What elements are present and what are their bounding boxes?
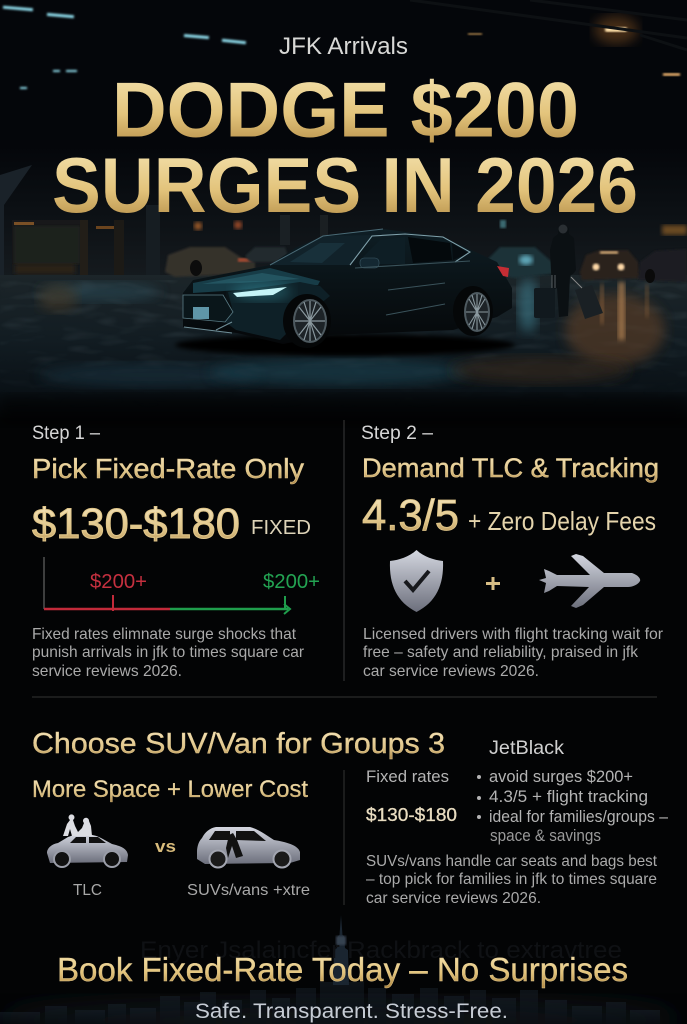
icon: sedan with two passengers: [47, 814, 128, 867]
tagline: Safe. Transparent. Stress-Free.: [195, 999, 508, 1023]
terminal structure: [0, 145, 687, 277]
step 2 heading: Demand TLC & Tracking: [362, 453, 659, 483]
icon: plus: [486, 577, 500, 590]
black sedan: [183, 229, 512, 348]
ground reflections: [38, 277, 665, 387]
price range small: $130-$180: [366, 804, 457, 825]
benefits list: space & savings: [490, 826, 601, 845]
step 3 description: [366, 853, 658, 907]
step 2 label: Step 2 –: [361, 423, 433, 444]
benefits list: 4.3/5 + flight tracking: [489, 787, 648, 806]
brand: JetBlack: JetBlack: [489, 737, 564, 759]
car shadow: [175, 334, 515, 356]
background cars: [165, 247, 687, 283]
call to action: Book Fixed-Rate Today – No Surprises: [57, 952, 628, 989]
step 1 heading: Pick Fixed-Rate Only: [32, 453, 304, 484]
fixed tag: FIXED: [251, 517, 311, 539]
step 1 description: [32, 626, 305, 680]
zero delay fees: + Zero Delay Fees: [468, 506, 656, 536]
fade to black below the photo: [0, 395, 687, 425]
label: TLC: TLC: [73, 882, 102, 899]
chart: surge versus fixed price line: $200+: [90, 571, 147, 593]
traveller with luggage: [534, 224, 603, 319]
benefits list: avoid surges $200+: [489, 767, 633, 786]
vs label: vs: [155, 837, 176, 856]
ground texture: [6, 280, 686, 360]
main title: SURGES IN 2026: [52, 141, 638, 229]
hero photo: night airport scene with black sedan: [0, 0, 687, 425]
ceiling lights: [3, 0, 687, 89]
panel: step 3, SUV or van for groups: [32, 728, 668, 907]
panel: step 1: [32, 423, 320, 680]
step 2 description: [363, 626, 664, 680]
front wheel: [283, 294, 331, 348]
footer skyline: [0, 915, 680, 1024]
rear wheel: [453, 286, 493, 336]
icon: shield with check: [390, 550, 443, 612]
step 2 description: free – safety and reliability, praised in jfk: [363, 644, 639, 661]
step 3 heading: Choose SUV/Van for Groups 3: [32, 728, 445, 760]
main title: [52, 66, 638, 229]
benefits list: [477, 767, 668, 845]
benefits list: ideal for families/groups –: [489, 807, 668, 826]
main title: DODGE $200: [112, 66, 579, 154]
chart: surge versus fixed price line: $200+: [263, 571, 320, 593]
step 2 description: car service reviews 2026.: [363, 663, 539, 680]
rating: 4.3/5: [362, 491, 459, 540]
chart: surge versus fixed price line: [44, 557, 320, 614]
step 3 subheading: More Space + Lower Cost: [32, 776, 308, 803]
step 1 description: service reviews 2026.: [32, 663, 182, 680]
icon: airplane: [539, 554, 640, 608]
step 3 description: car service reviews 2026.: [366, 890, 541, 907]
step 1 description: punish arrivals in jfk to times square car: [32, 644, 305, 661]
step 3 description: SUVs/vans handle car seats and bags best: [366, 853, 658, 870]
step 3 description: – top pick for families in jfk to times square: [366, 871, 657, 888]
wet ground: [0, 275, 687, 420]
faint background footer text: Enyer Jsalaincfer Rackbrack to extravtree: [140, 937, 622, 964]
step 1 label: Step 1 –: [32, 423, 100, 444]
step 2 description: Licensed drivers with flight tracking wait for: [363, 626, 664, 643]
label: fixed rates: Fixed rates: [366, 768, 449, 786]
icon: van with open door: [197, 827, 300, 868]
step 1 description: Fixed rates elimnate surge shocks that: [32, 626, 297, 643]
kicker: JFK Arrivals: JFK Arrivals: [279, 33, 408, 60]
label: SUVs and vans: SUVs/vans +xtre: [187, 882, 310, 899]
panel: step 2: [361, 423, 664, 680]
price range: $130-$180: [32, 500, 240, 548]
